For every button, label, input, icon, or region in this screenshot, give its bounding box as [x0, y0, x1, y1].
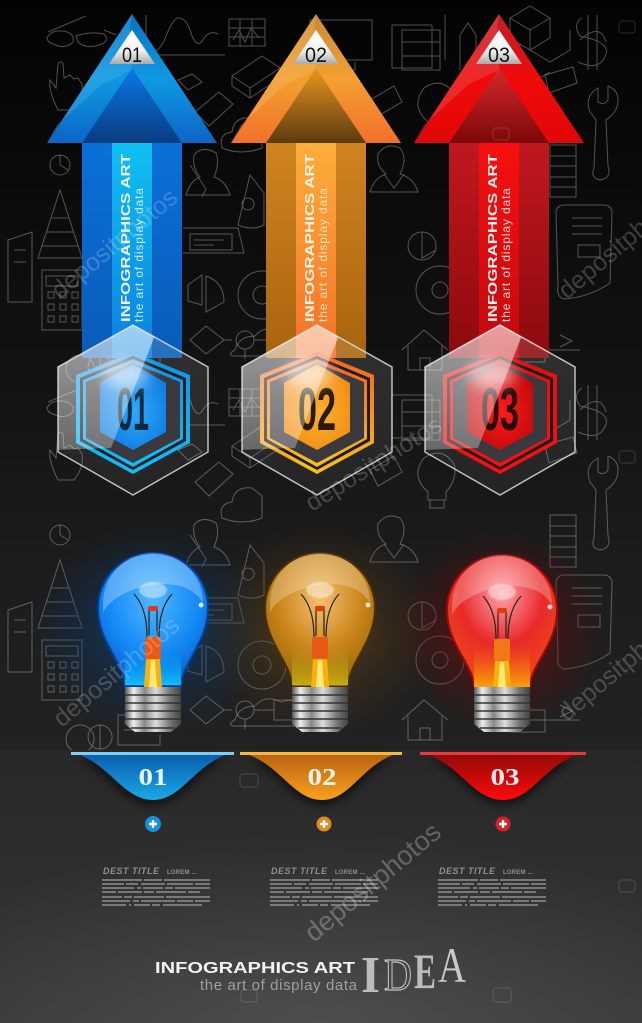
text block 1	[102, 866, 210, 905]
watermarks: depositphotos	[46, 183, 183, 305]
camera watermarks	[240, 21, 635, 1002]
vertical tagline: the art of display data	[316, 188, 330, 322]
light bulb blue	[98, 553, 208, 737]
watermarks: depositphotos	[300, 411, 447, 517]
arrow 2 orange	[231, 14, 401, 358]
watermarks: depositphotos	[299, 817, 447, 948]
watermarks: depositphotos	[48, 611, 185, 733]
sketched IDEA word	[361, 937, 466, 1004]
sketched IDEA word: E	[414, 943, 436, 999]
arrow 3 red	[414, 14, 584, 358]
bulb glows	[30, 525, 605, 735]
vertical title: INFOGRAPHICS ART	[302, 154, 317, 322]
arrow centre band	[112, 143, 152, 358]
sketched IDEA word: D	[384, 949, 412, 1000]
text block 1: DEST TITLE	[103, 866, 160, 876]
hexagon badge 01	[53, 320, 208, 495]
number tip 02	[293, 30, 339, 67]
plus icon red	[496, 816, 510, 832]
light bulb red	[447, 555, 557, 737]
arrow head	[414, 14, 584, 143]
light bulb orange	[265, 553, 375, 737]
tab 02	[240, 752, 402, 806]
sketched IDEA word: A	[438, 937, 466, 993]
number tip 03: 03	[488, 44, 510, 67]
text block 3	[438, 866, 546, 905]
tab 03	[420, 752, 586, 806]
number tip 01: 01	[122, 44, 142, 67]
text block 2: DEST TITLE	[271, 866, 328, 876]
number 03: 03	[481, 376, 519, 443]
number tip 01	[109, 30, 155, 67]
watermarks	[46, 183, 642, 948]
text block 3: DEST TITLE	[439, 866, 496, 876]
arrow 1 blue	[47, 14, 217, 358]
plus icon blue	[145, 816, 161, 832]
arrow shaft	[266, 143, 366, 358]
tab 03: 03	[490, 765, 520, 791]
text block 2	[270, 866, 378, 905]
text block 1: LOREM ...	[167, 870, 197, 876]
bottom panel	[0, 750, 642, 1023]
doodle sketches lower	[8, 376, 618, 753]
arrow head	[47, 14, 217, 143]
arrow head	[231, 14, 401, 143]
vertical tagline: the art of display data	[499, 188, 513, 322]
vertical title: INFOGRAPHICS ART	[485, 154, 500, 322]
background chalkboard	[0, 0, 642, 760]
number tip 02: 02	[305, 44, 327, 67]
text block 2: LOREM ...	[335, 870, 365, 876]
hexagon badge 02	[237, 320, 392, 495]
vertical title: INFOGRAPHICS ART	[118, 154, 133, 322]
arrow shaft	[449, 143, 549, 358]
tab 01: 01	[138, 765, 168, 791]
doodle sketches upper	[8, 6, 618, 383]
number tip 03	[476, 30, 522, 67]
text block 3: LOREM ...	[503, 870, 533, 876]
arrow shaft	[82, 143, 182, 358]
footer tagline: the art of display data	[200, 977, 358, 994]
footer title: INFOGRAPHICS ART	[155, 960, 355, 977]
sketched IDEA word: I	[361, 947, 380, 1004]
hexagon badge 01: 01	[117, 376, 149, 443]
arrow centre band	[479, 143, 519, 358]
arrow centre band	[296, 143, 336, 358]
tab 02: 02	[308, 765, 336, 791]
vertical tagline: the art of display data	[132, 188, 146, 322]
plus icon orange	[316, 816, 332, 832]
tab 01	[71, 752, 234, 806]
hexagon badge 03	[420, 320, 575, 495]
number 02: 02	[298, 376, 336, 443]
